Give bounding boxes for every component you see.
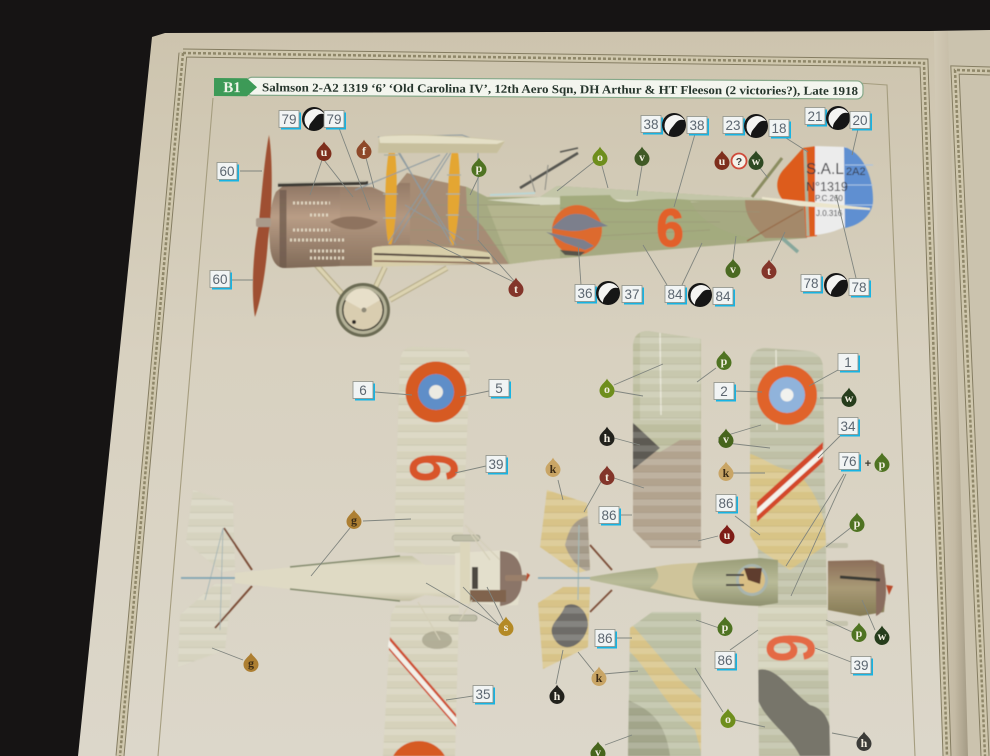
- chip 86 left: 86: [601, 508, 617, 523]
- next page frame: [955, 70, 990, 756]
- drop h: [856, 732, 872, 751]
- drop p: p: [722, 620, 729, 634]
- drop v: v: [723, 432, 729, 446]
- drop t: [600, 466, 614, 485]
- drop g: [244, 652, 258, 672]
- drops u, question mark, w: ?: [736, 156, 742, 168]
- drop s: s: [504, 620, 509, 634]
- rudder markings: N°1319: [806, 180, 848, 194]
- chip 78: 78: [851, 280, 867, 295]
- fuselage camouflage: [650, 563, 700, 600]
- cockpit opening: [726, 564, 768, 596]
- chip 79: [279, 107, 346, 131]
- chip 84: 84: [715, 289, 731, 304]
- chip 34: 34: [840, 419, 856, 434]
- chip 2: [714, 382, 736, 402]
- chip 84: 84: [667, 287, 683, 302]
- chip 78: 78: [803, 276, 819, 291]
- chip 79: 79: [281, 112, 297, 127]
- drop u: u: [321, 145, 328, 159]
- fuselage number 6: 6: [656, 198, 684, 257]
- chip 6: 6: [359, 383, 367, 398]
- chip 86 lower left: [595, 630, 617, 648]
- drop w: [842, 388, 856, 407]
- drop k: [546, 458, 560, 477]
- drop t: t: [514, 282, 518, 296]
- bracing wires: [355, 135, 478, 245]
- drop v: [590, 742, 606, 756]
- chip 38: [641, 113, 709, 137]
- drop p: p: [854, 516, 861, 530]
- lower wing B lower panel: [625, 610, 705, 756]
- drop v: [634, 146, 650, 166]
- upper wing top: [394, 347, 470, 556]
- chip 38: 38: [689, 118, 705, 133]
- heading: profile title banner: [214, 77, 863, 100]
- upper wing underside: [750, 348, 830, 756]
- chip 5: 5: [495, 381, 503, 396]
- chip 36 37: [575, 281, 644, 305]
- fuselage tail needle: [181, 577, 235, 579]
- drop h: [600, 426, 614, 446]
- exhaust pipe on cowling: [278, 183, 368, 185]
- chip 21 20: [805, 106, 872, 130]
- chip 23 18: [723, 114, 791, 138]
- propeller: [253, 135, 272, 317]
- aircraft side profile: [253, 135, 873, 337]
- rudder markings: 2A2: [846, 166, 866, 178]
- chip 23 18: 18: [771, 121, 787, 136]
- lower wing section: [383, 605, 459, 756]
- drop t: [762, 260, 776, 279]
- drop v: [718, 428, 734, 448]
- drop f: [356, 140, 372, 159]
- drop o: o: [725, 712, 731, 726]
- chip 1: [838, 354, 860, 372]
- aircraft underside view: [535, 330, 893, 756]
- drop h: h: [861, 736, 868, 750]
- drop p: p: [856, 626, 863, 640]
- chip 21 20: 20: [852, 113, 868, 128]
- drop k: k: [550, 462, 557, 476]
- drop g: [346, 510, 362, 529]
- drop k: k: [596, 671, 603, 685]
- drop o: o: [604, 382, 610, 396]
- drop p: p: [476, 161, 483, 175]
- tailplanes: [178, 490, 252, 667]
- chip 60 lower: [210, 270, 232, 290]
- lower wing: [372, 246, 493, 267]
- drop s: [498, 616, 514, 636]
- upper wing: [378, 135, 505, 153]
- drop v: v: [730, 262, 736, 276]
- chip 86 upper right: 86: [718, 496, 734, 511]
- drop u: u: [724, 528, 731, 542]
- drop t: [508, 278, 524, 297]
- drop h: h: [604, 431, 611, 445]
- chip 34: [838, 418, 860, 436]
- drop t: t: [605, 470, 609, 484]
- drops u, question mark, w: w: [752, 154, 761, 168]
- chip 6: [353, 382, 375, 400]
- drop w: w: [878, 629, 887, 643]
- drop w: w: [845, 391, 854, 405]
- chip 38: 38: [643, 117, 659, 132]
- drop p: [472, 158, 486, 177]
- chip 76 plus p: p: [879, 457, 886, 471]
- fuselage camouflage edge: [290, 556, 400, 601]
- engine cowling top view: [455, 550, 530, 606]
- drop u: [316, 142, 332, 161]
- drop h: h: [554, 689, 561, 703]
- inner thin frame: [158, 83, 915, 756]
- chip 60 upper: 60: [219, 164, 235, 179]
- lower wing A upper panel: [630, 330, 705, 550]
- chip 39 top: 39: [488, 457, 504, 472]
- drop p: [718, 616, 732, 636]
- right-hand page edge: [930, 30, 990, 756]
- upper wing centre strut section: [460, 542, 470, 604]
- landing gear: [310, 258, 447, 300]
- fuselage side: [268, 172, 808, 269]
- chip 86 lower right: [715, 652, 737, 670]
- badge text: B1: [223, 80, 241, 96]
- drop o: [600, 378, 614, 398]
- chip 60 upper: [217, 162, 239, 182]
- chip 39 lower: 39: [853, 658, 869, 673]
- rudder markings: S.A.L: [806, 161, 844, 178]
- drop t: t: [767, 264, 771, 278]
- drops u, question mark, w: [714, 150, 764, 170]
- red and white wing stripe: [389, 637, 456, 727]
- drop k: k: [723, 466, 730, 480]
- chip 84: [665, 283, 735, 307]
- page gutter: [934, 31, 968, 756]
- aircraft top view: [178, 347, 530, 756]
- title ribbon: [246, 77, 863, 99]
- drop g: g: [351, 513, 357, 527]
- wing number 6: 6: [395, 453, 472, 483]
- rudder and fin: [747, 146, 873, 252]
- rudder markings: [806, 161, 866, 218]
- drop p: [716, 350, 732, 370]
- chip 1: 1: [844, 355, 852, 370]
- fuselage underside: [590, 558, 778, 606]
- chip 86 left: [599, 506, 621, 526]
- chip 86 lower left: 86: [597, 631, 613, 646]
- chip 23 18: 23: [725, 118, 741, 133]
- chip 76 plus p: [839, 452, 890, 472]
- drop u: [720, 524, 734, 544]
- chip 36 37: 36: [577, 286, 593, 301]
- drop k: [718, 462, 734, 481]
- underwing shadow: [422, 631, 452, 649]
- lower wing roundel peek: [393, 741, 445, 756]
- chip 86 upper right: [716, 494, 738, 514]
- chip 39 lower: [851, 656, 873, 676]
- rudder markings: P.C.260: [815, 194, 843, 203]
- chip 39 top: [486, 456, 508, 474]
- drop h: [550, 684, 564, 704]
- chip 36 37: 37: [624, 287, 640, 302]
- chip 35: 35: [475, 687, 491, 702]
- drop p: p: [721, 354, 728, 368]
- drop f: f: [362, 144, 367, 158]
- chip 5: [489, 380, 511, 398]
- underside number 6: 6: [752, 633, 829, 663]
- drop w: [874, 626, 890, 645]
- wheel: [336, 283, 390, 337]
- yellow wing struts: [383, 143, 461, 245]
- fuselage roundel with kicking mule emblem: [546, 205, 608, 256]
- title text: Salmson 2-A2 1319 ‘6’ ‘Old Carolina IV’, 12th Aero Sqn, DH Arthur & HT Fleeson (2 victories?), Late 1918: [262, 80, 858, 98]
- chip 79: 79: [326, 112, 342, 127]
- underside stripe: [757, 442, 823, 522]
- drop o: [720, 708, 736, 728]
- chip 86 lower right: 86: [717, 653, 733, 668]
- front struts: [418, 525, 500, 640]
- chip 35: [473, 686, 495, 704]
- tailplanes underside: [535, 485, 612, 675]
- chip 60 lower: 60: [212, 272, 228, 287]
- drop o: [592, 146, 608, 166]
- drop p: [852, 622, 866, 642]
- ornamental page frame: [120, 53, 947, 756]
- drop p: [850, 512, 864, 532]
- fuselage top: [235, 556, 475, 601]
- green B1 badge: [214, 78, 257, 96]
- drop g: g: [248, 656, 254, 670]
- chip 78: [801, 273, 871, 298]
- drop v: [726, 258, 740, 278]
- callouts: number boxes and colour chips: [210, 106, 890, 756]
- upper wing roundel: [406, 362, 466, 422]
- tail needle: [538, 577, 590, 579]
- chip 76 plus p: +: [865, 458, 871, 470]
- chip 76 plus p: 76: [841, 454, 857, 469]
- drop v: v: [639, 150, 645, 164]
- drop o: o: [597, 150, 603, 164]
- drops u, question mark, w: u: [719, 154, 726, 168]
- machine gun: [490, 148, 578, 195]
- rudder markings: J.0.316: [816, 209, 843, 218]
- chip 21 20: 21: [807, 109, 823, 124]
- chip 2: 2: [720, 384, 728, 399]
- wheels and gear from below: [826, 543, 848, 626]
- leader lines: [212, 128, 875, 745]
- engine from below: [828, 560, 893, 616]
- underside roundel: [757, 365, 817, 425]
- wheels from above: [449, 535, 480, 621]
- drop k: [592, 666, 606, 686]
